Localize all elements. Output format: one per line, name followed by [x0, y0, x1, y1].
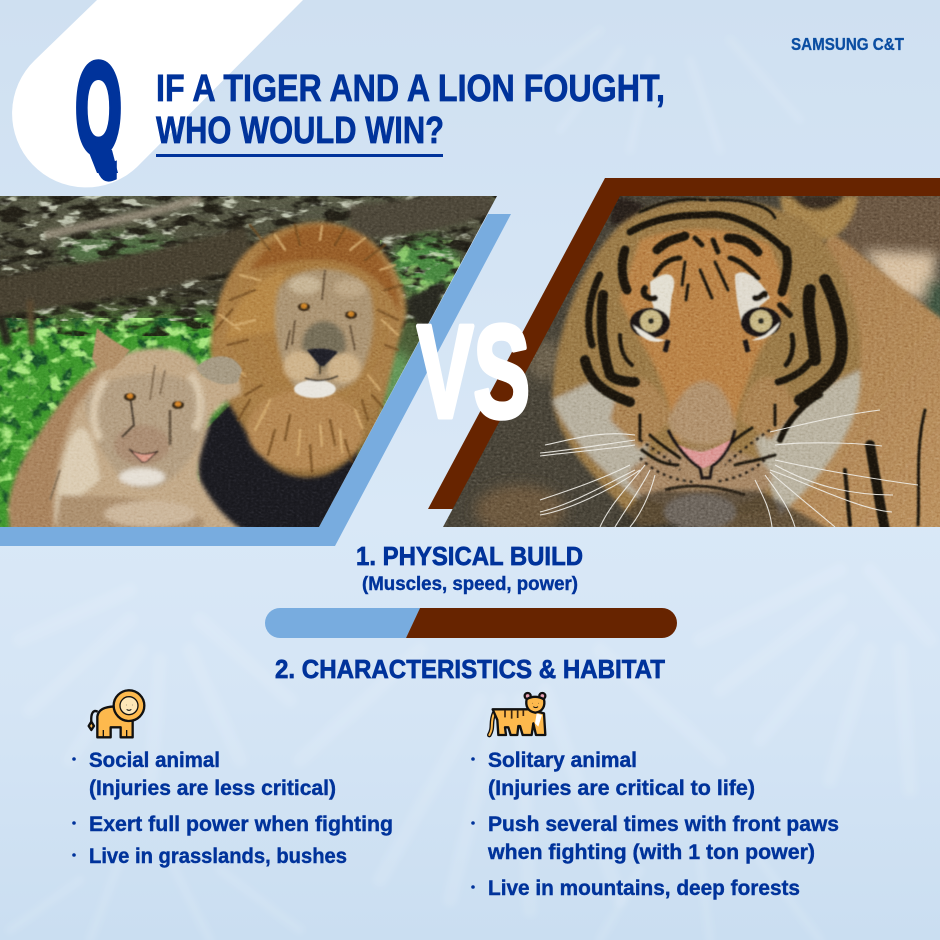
list: tiger facts: Push several times with front paws	[488, 813, 839, 836]
brand logo text: SAMSUNG C&T	[791, 34, 904, 54]
mane strands	[215, 225, 402, 472]
icon: tiger	[489, 693, 545, 735]
section 1 heading: (Muscles, speed, power)	[362, 574, 578, 595]
whiskers	[540, 410, 918, 527]
list: tiger facts: Live in mountains, deep forests	[488, 877, 800, 900]
title: IF A TIGER AND A LION FOUGHT,	[156, 68, 665, 110]
VS text: VS	[417, 298, 530, 445]
title: WHO WOULD WIN?	[156, 110, 444, 152]
section 1 heading	[356, 541, 583, 595]
list: tiger facts: (Injuries are critical to life)	[488, 777, 755, 800]
list: tiger facts: Solitary animal	[488, 749, 637, 772]
Q letter	[75, 35, 122, 181]
list: lion facts: (Injuries are less critical)	[89, 777, 336, 800]
list: lion facts: Exert full power when fighting	[89, 813, 393, 836]
muzzle spots	[640, 430, 770, 482]
section 2 heading: 2. CHARACTERISTICS & HABITAT	[275, 654, 665, 684]
title	[156, 68, 665, 157]
white brow patches	[650, 274, 674, 330]
blue frame behind lion photo	[0, 214, 511, 546]
tiger body	[700, 230, 940, 535]
list: tiger facts: when fighting (with 1 ton power)	[487, 841, 815, 864]
icon: lion	[89, 690, 144, 737]
list: tiger facts	[471, 749, 839, 900]
list: lion facts	[72, 749, 393, 868]
black stripes	[585, 199, 925, 530]
white rounded banner	[12, 0, 303, 187]
tiger head	[552, 199, 861, 530]
eyes	[630, 308, 670, 338]
comparison bar	[265, 608, 677, 638]
list: lion facts: Live in grasslands, bushes	[89, 845, 347, 868]
text: Q	[75, 35, 122, 181]
nose	[675, 440, 730, 468]
lioness	[8, 328, 250, 535]
tiger photo	[440, 190, 940, 535]
list: lion facts: Social animal	[89, 749, 220, 772]
brown frame behind tiger photo	[428, 178, 940, 509]
section 1 heading: 1. PHYSICAL BUILD	[356, 541, 583, 571]
tiger ears	[610, 196, 858, 241]
male lion	[195, 222, 406, 530]
lion photo	[0, 190, 500, 540]
male lion face	[275, 269, 374, 394]
